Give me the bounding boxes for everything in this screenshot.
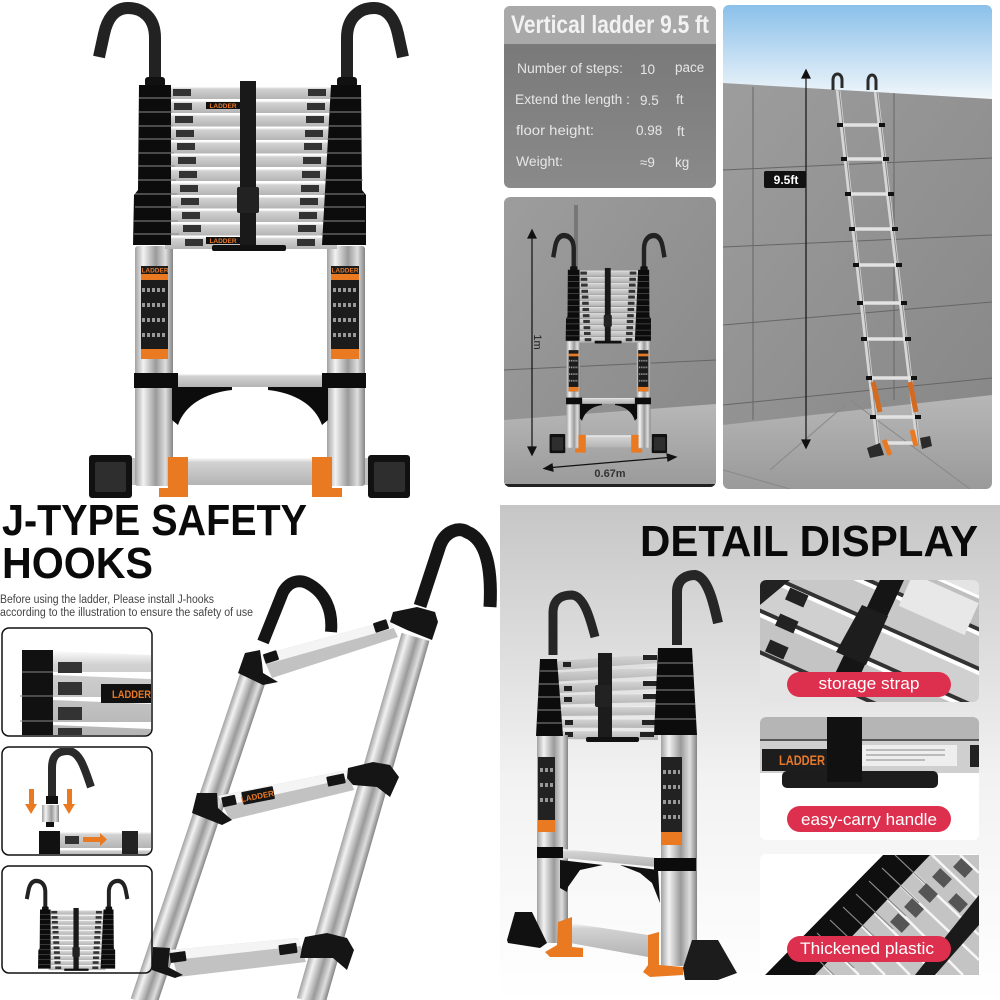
panel: extended ladder against wall bbox=[723, 5, 992, 489]
brand label lower rung bbox=[206, 237, 240, 245]
detail ladder bbox=[507, 575, 737, 980]
collars and pads bbox=[152, 607, 438, 978]
inset: installed hooks bbox=[2, 866, 152, 973]
text block: hook instructions: according to the illustration to ensure the safety of use bbox=[0, 607, 253, 619]
card: easy-carry handle bbox=[760, 717, 979, 840]
panel: large angled ladder with hooks bbox=[131, 530, 490, 1000]
folded ladder bbox=[550, 236, 667, 453]
label pill bbox=[787, 936, 951, 962]
heading: J-type safety hooks: J-TYPE SAFETY bbox=[2, 496, 307, 545]
left rail bbox=[131, 672, 266, 1000]
panel: folded dimensions bbox=[504, 197, 716, 487]
text block: hook instructions: Before using the ladder, Please install J-hooks bbox=[0, 594, 214, 606]
row: extended length: Extend the length : bbox=[515, 92, 630, 107]
bottom rung bbox=[170, 938, 306, 977]
label pill bbox=[787, 672, 951, 697]
row: number of steps: 10 bbox=[640, 62, 655, 77]
row: weight: Weight: bbox=[516, 154, 563, 169]
row: floor height bbox=[516, 123, 685, 139]
row: number of steps bbox=[517, 60, 704, 77]
right hook bbox=[420, 530, 490, 607]
height label: 9.5ft bbox=[774, 173, 798, 187]
row: number of steps: Number of steps: bbox=[517, 61, 623, 76]
brand label: LADDER bbox=[779, 752, 825, 768]
middle rung bbox=[218, 770, 354, 820]
left hook bbox=[263, 581, 331, 642]
row: extended length: 9.5 bbox=[640, 93, 659, 108]
rung brand label: LADDER bbox=[240, 789, 275, 804]
width arrow bbox=[544, 454, 676, 471]
row: number of steps: pace bbox=[675, 60, 704, 75]
wall-leaning ladder bbox=[833, 74, 932, 458]
brand label left tube: LADDER bbox=[141, 268, 169, 274]
heading: detail display: DETAIL DISPLAY bbox=[640, 517, 978, 566]
panel: main ladder product shot bbox=[89, 8, 410, 498]
height arrow bbox=[528, 230, 536, 455]
height label: 1m bbox=[531, 334, 543, 350]
height label bbox=[764, 171, 806, 188]
inset: rung close-up bbox=[2, 628, 152, 737]
brand label upper rung: LADDER bbox=[209, 103, 237, 110]
card: thickened plastic bbox=[760, 854, 979, 976]
row: floor height: 0.98 bbox=[636, 123, 662, 138]
label pill bbox=[787, 806, 951, 832]
heading: J-type safety hooks: HOOKS bbox=[2, 539, 153, 588]
label pill: easy-carry handle bbox=[801, 810, 937, 829]
table heading: Vertical ladder 9.5 ft bbox=[511, 11, 710, 39]
row: floor height: ft bbox=[677, 124, 685, 139]
top rung bbox=[262, 620, 398, 678]
row: floor height: floor height: bbox=[516, 123, 594, 138]
brand label right tube: LADDER bbox=[331, 268, 359, 274]
row: extended length bbox=[515, 92, 684, 108]
brand label: LADDER bbox=[112, 689, 151, 701]
heading: J-type safety hooks bbox=[2, 496, 307, 588]
inset: hook installation bbox=[2, 747, 152, 855]
label pill: storage strap bbox=[818, 674, 920, 693]
row: extended length: ft bbox=[676, 92, 684, 107]
label pill: Thickened plastic bbox=[800, 939, 935, 958]
panel: detail display background bbox=[500, 505, 1000, 1000]
row: weight: ≈9 bbox=[640, 155, 655, 170]
brand label upper rung bbox=[206, 102, 240, 110]
orange arrows bbox=[25, 789, 75, 814]
text block: hook instructions bbox=[0, 594, 253, 619]
width label: 0.67m bbox=[594, 468, 626, 480]
panel: specification table bbox=[504, 6, 716, 188]
right rail bbox=[297, 633, 429, 1000]
card: storage strap bbox=[760, 580, 979, 702]
row: weight: kg bbox=[675, 155, 689, 170]
brand label lower rung: LADDER bbox=[209, 238, 237, 245]
height arrow bbox=[802, 70, 810, 448]
row: weight bbox=[516, 154, 689, 170]
